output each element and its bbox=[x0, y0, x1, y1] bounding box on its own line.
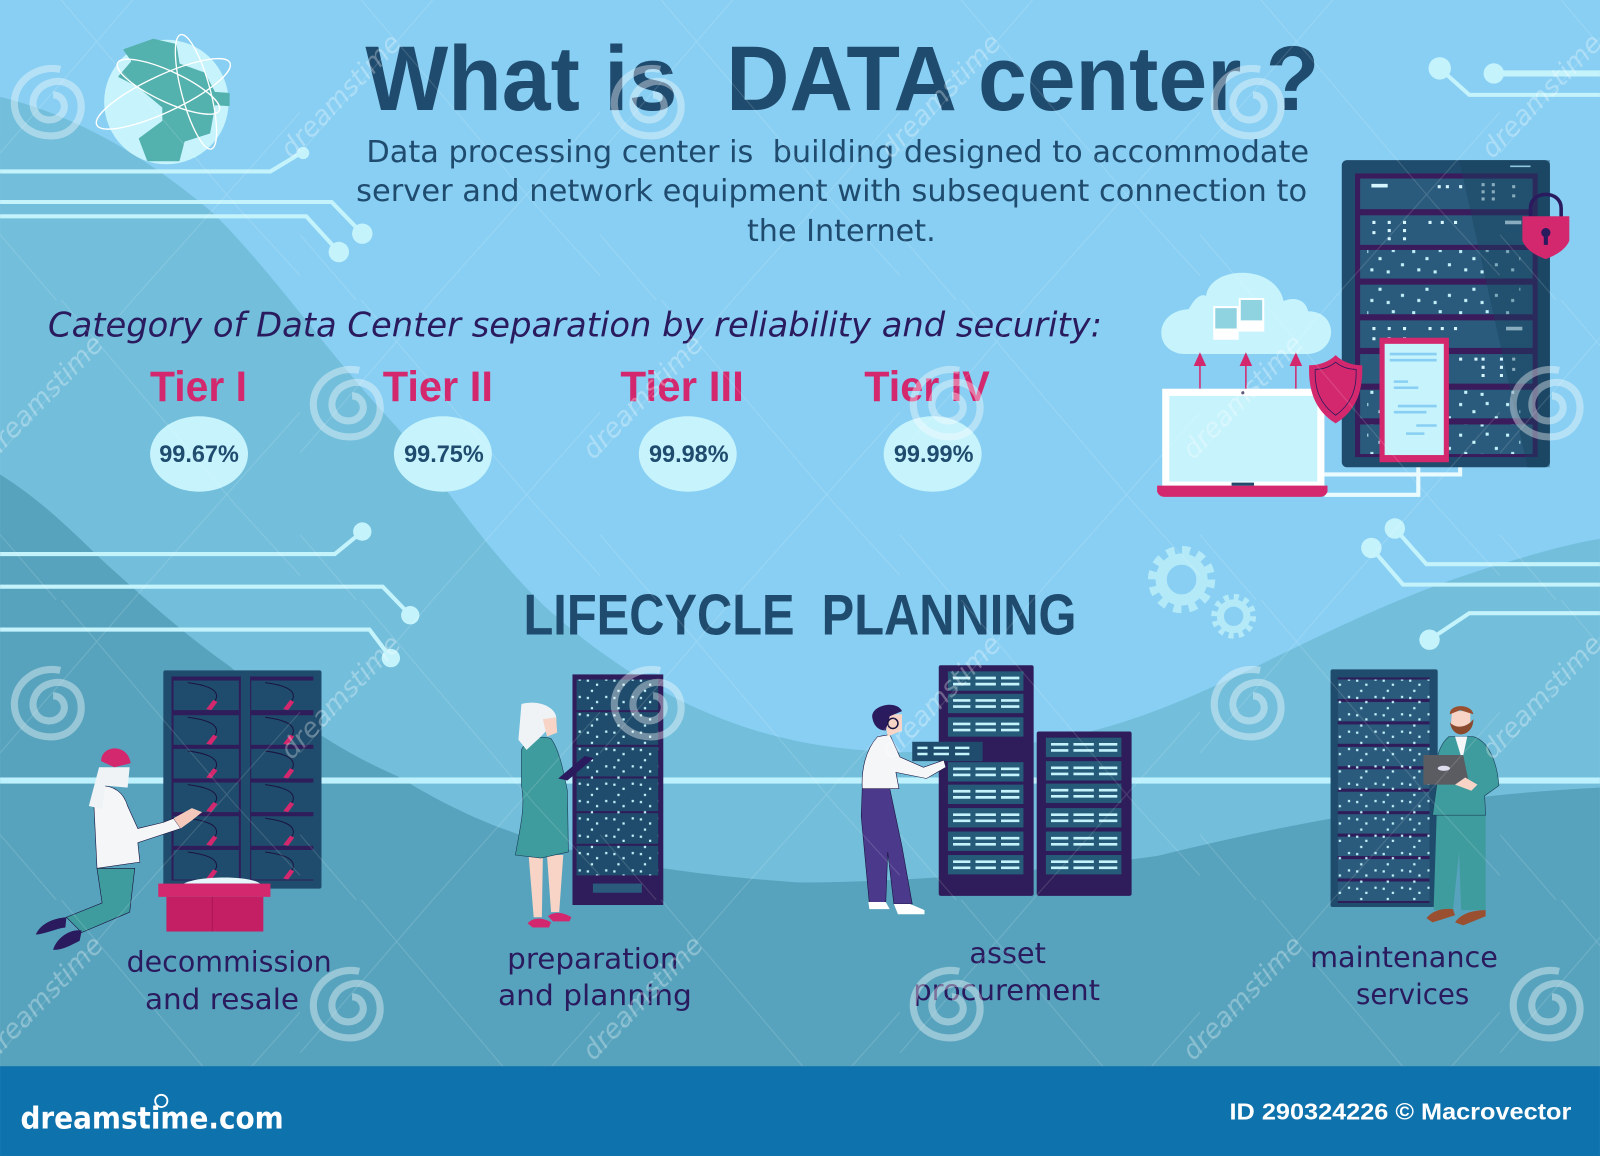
watermark: dreamstime text: dreamstime bbox=[1176, 930, 1309, 1066]
decommission server rack bbox=[163, 670, 321, 889]
tier III: 99.98% bbox=[649, 441, 729, 468]
icon: laptop bbox=[1157, 389, 1327, 497]
watermark: dreamstime text: dreamstime bbox=[274, 28, 408, 164]
caption bbox=[498, 941, 692, 1012]
caption: preparation bbox=[507, 941, 679, 975]
asset server racks bbox=[912, 665, 1132, 896]
woman with tablet bbox=[515, 703, 594, 927]
caption bbox=[1310, 940, 1498, 1011]
arrows: upload to cloud bbox=[1195, 354, 1301, 389]
tier II bbox=[383, 363, 493, 492]
tier IV bbox=[864, 363, 990, 492]
watermark: dreamstime text: dreamstime bbox=[874, 629, 1007, 765]
icon: tablet bbox=[1380, 338, 1449, 462]
caption: services bbox=[1356, 977, 1469, 1011]
heading: lifecycle planning: LIFECYCLE PLANNING bbox=[523, 584, 1077, 648]
tier IV: Tier IV bbox=[864, 363, 990, 411]
icon: cloud with photos bbox=[1161, 273, 1331, 354]
preparation server rack bbox=[572, 674, 663, 905]
caption: and planning bbox=[498, 978, 692, 1012]
tier I: Tier I bbox=[150, 363, 247, 411]
watermark: dreamstime text: dreamstime bbox=[874, 28, 1007, 164]
man with laptop bbox=[1423, 706, 1499, 925]
illustration: connected wires bbox=[1324, 464, 1460, 495]
caption bbox=[127, 944, 332, 1016]
step: asset procurement bbox=[861, 665, 1132, 1007]
caption: asset bbox=[969, 936, 1046, 970]
tier I: 99.67% bbox=[159, 441, 239, 468]
caption: maintenance bbox=[1310, 940, 1498, 974]
footer bar bbox=[0, 1066, 1600, 1156]
illustration: big server rack bbox=[1342, 160, 1550, 467]
tier II: Tier II bbox=[383, 363, 493, 411]
watermark: dreamstime text: dreamstime bbox=[576, 329, 710, 465]
circuit lines: middle right bbox=[1361, 518, 1600, 650]
circuit lines: top right bbox=[1429, 57, 1600, 95]
footer bar: ID 290324226 © Macrovector bbox=[1230, 1098, 1571, 1124]
watermark: dreamstime text: dreamstime bbox=[274, 629, 408, 765]
caption: and resale bbox=[145, 982, 299, 1016]
icon: shield bbox=[1309, 355, 1362, 423]
intro text: server and network equipment with subsequent connection to bbox=[356, 174, 1307, 209]
icon: gears bbox=[1152, 550, 1253, 636]
tier IV: 99.99% bbox=[894, 441, 974, 468]
step: preparation and planning bbox=[498, 674, 692, 1012]
tier III: Tier III bbox=[620, 363, 744, 411]
icon: padlock bbox=[1522, 194, 1569, 259]
step: maintenance services bbox=[1310, 669, 1499, 1011]
tier III bbox=[620, 363, 744, 492]
watermark: dreamstime text: dreamstime bbox=[1176, 329, 1309, 465]
background: lower wave bbox=[0, 474, 1600, 1156]
footer bar: dreamstime.com bbox=[20, 1101, 284, 1136]
circuit lines: top left bbox=[0, 147, 372, 262]
maintenance server rack bbox=[1331, 669, 1438, 907]
category heading: Category of Data Center separation by reliability and security: bbox=[48, 306, 1102, 345]
caption: decommission bbox=[127, 944, 332, 978]
watermark: dreamstime text: dreamstime bbox=[576, 930, 710, 1066]
horizontal timeline line bbox=[0, 777, 1600, 784]
intro text: the Internet. bbox=[747, 214, 936, 249]
title: What is DATA center ? bbox=[365, 28, 1319, 130]
icon: globe bbox=[89, 31, 238, 164]
caption: procurement bbox=[913, 973, 1100, 1007]
pink cable box bbox=[158, 877, 270, 932]
step: decommission and resale bbox=[36, 670, 332, 1016]
man pulling drawer bbox=[861, 705, 946, 914]
caption bbox=[913, 936, 1100, 1007]
intro text: Data processing center is building designed to accommodate bbox=[366, 135, 1309, 170]
tier I bbox=[150, 363, 248, 492]
circuit lines: middle left bbox=[0, 522, 419, 667]
worker kneeling bbox=[36, 748, 202, 950]
intro text bbox=[356, 135, 1309, 249]
tier II: 99.75% bbox=[404, 441, 484, 468]
